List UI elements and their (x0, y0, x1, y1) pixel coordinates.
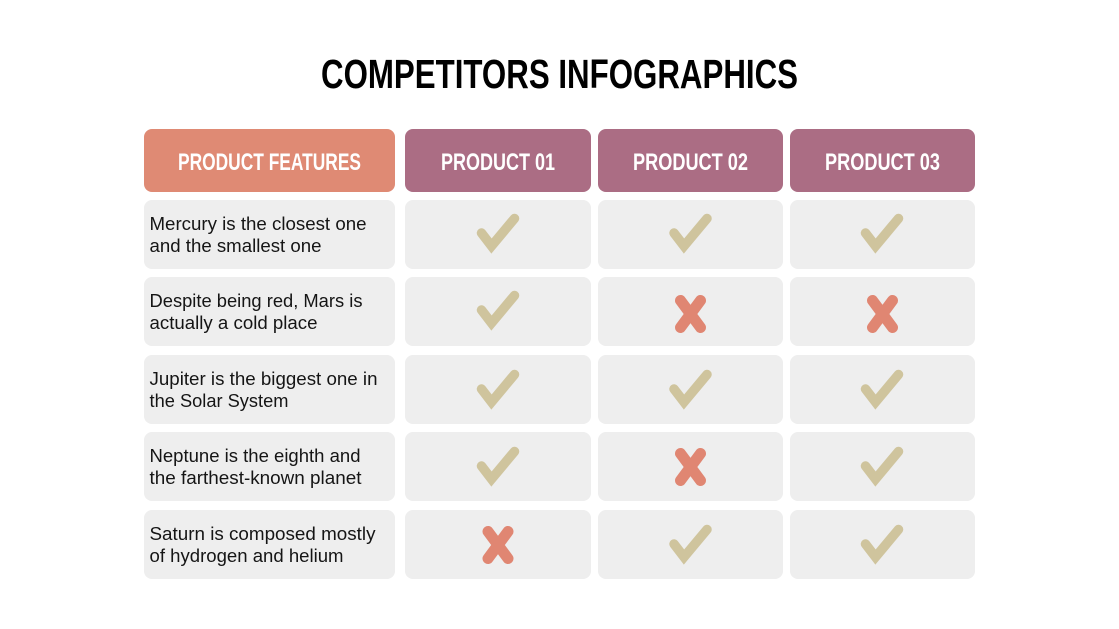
feature text: Jupiter: the Solar System (150, 390, 288, 411)
product 02: check (598, 510, 783, 579)
row 2: Mars (144, 277, 975, 346)
product 03: check (790, 200, 975, 269)
title: COMPETITORS INFOGRAPHICS (321, 51, 798, 97)
feature text: Saturn: of hydrogen and helium (150, 545, 344, 566)
product 01: cross (405, 510, 591, 579)
header: product 02: PRODUCT 02 (633, 149, 748, 176)
product 03: check (790, 355, 975, 424)
header: product 02 (598, 129, 783, 192)
feature text: Mars (144, 277, 395, 346)
feature text: Neptune (144, 432, 395, 501)
feature text: Mars: actually a cold place (150, 312, 318, 333)
product 03: check (790, 432, 975, 501)
header: product features (144, 129, 395, 192)
row 3: Jupiter (144, 355, 975, 424)
feature text: Neptune: the farthest-known planet (150, 467, 362, 488)
header: product features: PRODUCT FEATURES (178, 149, 361, 176)
header: product 01 (405, 129, 591, 192)
comparison table (144, 129, 975, 579)
row 5: Saturn (144, 510, 975, 579)
product 03: cross (790, 277, 975, 346)
header: product 01: PRODUCT 01 (441, 149, 555, 176)
product 01: check (405, 200, 591, 269)
feature text: Mars: Despite being red, Mars is (150, 290, 362, 311)
feature text: Mercury: Mercury is the closest one (150, 213, 366, 234)
product 02: cross (598, 277, 783, 346)
product 02: check (598, 200, 783, 269)
feature text: Mercury (144, 200, 395, 269)
row 4: Neptune (144, 432, 975, 501)
product 01: check (405, 277, 591, 346)
feature text: Jupiter (144, 355, 395, 424)
feature text: Neptune: Neptune is the eighth and (150, 445, 360, 466)
header: product 03 (790, 129, 975, 192)
feature text: Jupiter: Jupiter is the biggest one in (150, 368, 378, 389)
feature text: Saturn (144, 510, 395, 579)
product 02: cross (598, 432, 783, 501)
product 01: check (405, 432, 591, 501)
product 03: check (790, 510, 975, 579)
product 01: check (405, 355, 591, 424)
feature text: Saturn: Saturn is composed mostly (150, 523, 376, 544)
product 02: check (598, 355, 783, 424)
header: product 03: PRODUCT 03 (825, 149, 940, 176)
row 1: Mercury (144, 200, 975, 269)
feature text: Mercury: and the smallest one (150, 235, 322, 256)
